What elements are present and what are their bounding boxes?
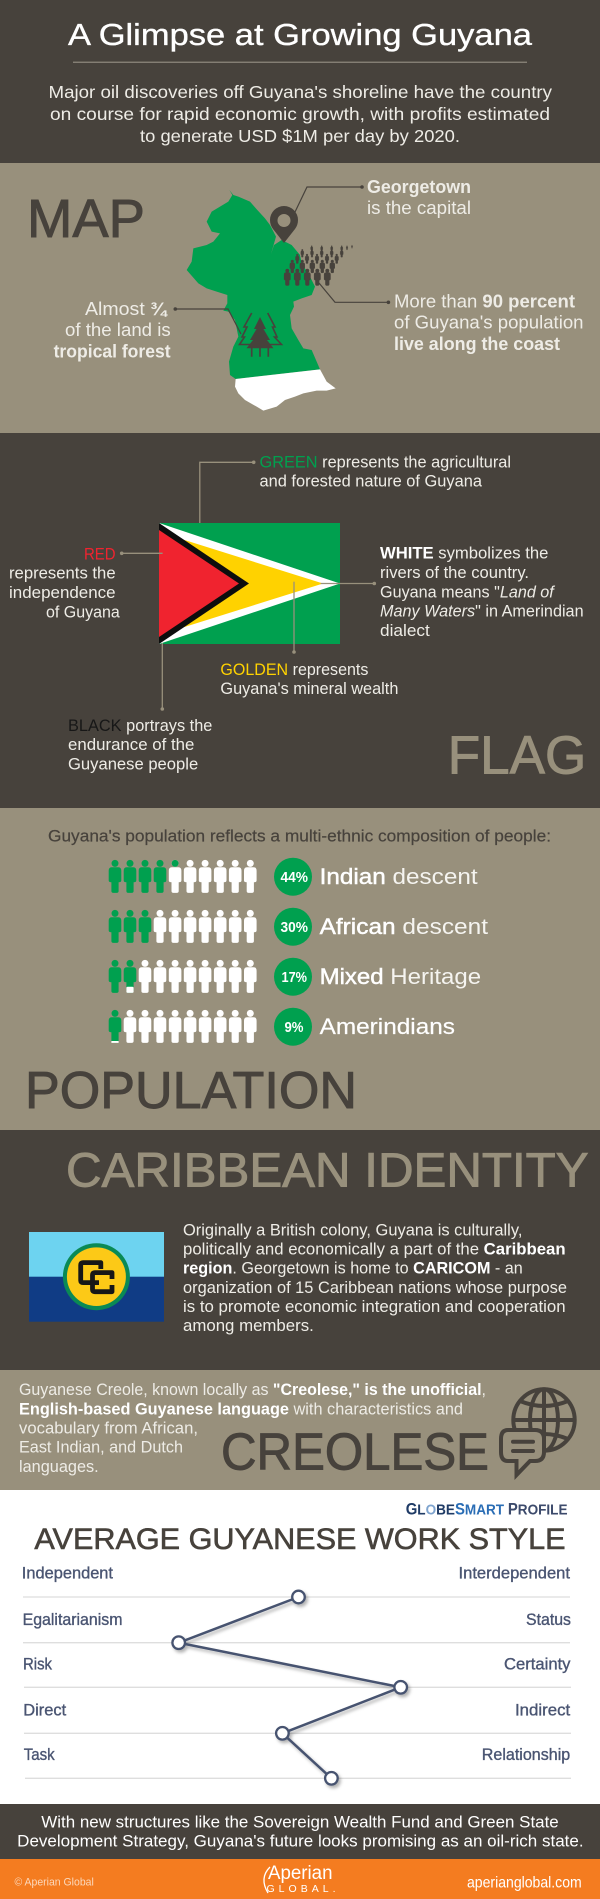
intro text: on course for rapid economic growth, with profits estimated: [50, 104, 550, 124]
stat badge: 17%: 17%: [282, 970, 307, 986]
panel: population: [0, 808, 600, 1130]
label: Indian descent: Indian descent: [320, 864, 478, 889]
Caribbean identity text: organization of 15 Caribbean nations whose purpose: [183, 1279, 567, 1297]
title: A Glimpse at Growing Guyana: [68, 17, 533, 52]
label: black: BLACK portrays the: [68, 717, 212, 735]
callout line: green: [200, 460, 256, 523]
label: tropical forest: of the land is: [65, 320, 171, 340]
pictogram row: Amerindians 9%: [109, 1010, 257, 1043]
panel: Creolese: [0, 1370, 600, 1490]
label: white: WHITE symbolizes the: [380, 545, 548, 563]
callout line: black: [160, 643, 164, 711]
intro text: Major oil discoveries off Guyana's shoreline have the country: [48, 82, 552, 102]
heading: FLAG: FLAG: [448, 725, 586, 785]
callout line: white: [321, 582, 376, 585]
line chart: work style profile: [172, 1591, 407, 1785]
label: red: independence: [9, 584, 116, 602]
label: tropical forest: Almost ¾: [85, 299, 169, 319]
logo: Aperian Global: [264, 1863, 336, 1895]
callout line: population: [319, 283, 390, 304]
label: black: endurance of the: [68, 736, 194, 754]
stat badge: 9%: [274, 1008, 312, 1046]
label: Georgetown: [367, 177, 471, 218]
Creolese text: [19, 1381, 486, 1476]
Caribbean identity text: region. Georgetown is home to CARICOM - an: [183, 1260, 523, 1278]
heading: CARIBBEAN IDENTITY: CARIBBEAN IDENTITY: [66, 1145, 589, 1198]
label: population along coast: [394, 291, 584, 354]
website: aperianglobal.com: [467, 1874, 582, 1891]
label: tropical forest: tropical forest: [54, 341, 171, 361]
label: white: rivers of the country.: [380, 564, 529, 582]
label: Georgetown: Georgetown: [367, 177, 471, 197]
labels: right dimensions: [458, 1565, 571, 1764]
label: Mixed Heritage: Mixed Heritage: [320, 964, 481, 989]
label: white: Guyana means "Land of: [380, 583, 556, 601]
labels: right dimensions: Status: [526, 1611, 571, 1629]
heading: POPULATION: POPULATION: [25, 1062, 357, 1120]
Caribbean identity text: Originally a British colony, Guyana is culturally,: [183, 1221, 522, 1239]
label: red: represents the: [9, 565, 116, 583]
stat badge: 44%: 44%: [280, 870, 308, 886]
conclusion text: [17, 1812, 584, 1851]
intro text: [48, 82, 552, 146]
panel: conclusion: [0, 1804, 600, 1859]
label: population along coast: More than 90 percent: [394, 291, 575, 311]
icon: coastal population crowd: [284, 245, 353, 285]
label: white: Many Waters" in Amerindian: [380, 602, 584, 620]
Creolese text: East Indian, and Dutch: [19, 1439, 183, 1457]
panel: header: [0, 0, 600, 163]
label: green: [260, 454, 511, 491]
conclusion text: With new structures like the Sovereign Wealth Fund and Green State: [41, 1812, 559, 1831]
labels: left dimensions: Egalitarianism: [23, 1611, 123, 1629]
callout line: red: [120, 552, 163, 555]
label: red: of Guyana: [46, 603, 121, 621]
logo: GlobeSmart Profile: GLOBESMART PROFILE: [406, 1500, 568, 1518]
Creolese text: languages.: [19, 1458, 99, 1476]
labels: right dimensions: Relationship: [482, 1746, 570, 1764]
labels: left dimensions: Direct: [23, 1701, 67, 1719]
stat badge: 30%: [274, 908, 312, 946]
heading: MAP: MAP: [27, 189, 145, 249]
Creolese text: Guyanese Creole, known locally as "Creolese," is the unofficial,: [19, 1381, 486, 1399]
label: white: [380, 545, 584, 640]
labels: left dimensions: Independent: [22, 1565, 113, 1583]
label: golden: Guyana's mineral wealth: [220, 680, 398, 698]
pictogram row: African 30%: [109, 910, 257, 943]
pictogram row: Mixed 17%: [109, 960, 257, 993]
copyright: © Aperian Global: [14, 1877, 94, 1889]
map of Guyana: [187, 190, 336, 411]
label: red: RED: [84, 545, 116, 563]
heading: CREOLESE: CREOLESE: [221, 1423, 489, 1481]
CARICOM flag: [29, 1232, 164, 1322]
Creolese text: vocabulary from African,: [19, 1420, 198, 1438]
label: tropical forest: [54, 299, 171, 361]
stat badge: 30%: 30%: [280, 920, 308, 936]
stat badge: 9%: 9%: [284, 1020, 304, 1036]
heading: Average Guyanese Work Style: AVERAGE GUYANESE WORK STYLE: [34, 1523, 566, 1556]
panel: footer: [0, 1859, 600, 1899]
callout line: forest: [174, 307, 241, 334]
label: golden: [220, 661, 398, 698]
labels: left dimensions: Task: [24, 1746, 55, 1764]
label: African descent: African descent: [320, 914, 488, 939]
stat badge: 17%: [274, 958, 312, 996]
label: black: [68, 717, 212, 773]
label: population along coast: of Guyana's population: [394, 313, 584, 333]
label: red: [9, 545, 121, 621]
panel: Caribbean identity: [0, 1130, 600, 1370]
Caribbean identity text: politically and economically a part of the Caribbean: [183, 1241, 566, 1259]
label: green: and forested nature of Guyana: [260, 473, 483, 491]
label: green: GREEN represents the agricultural: [260, 454, 511, 472]
label: Georgetown: is the capital: [367, 198, 471, 218]
labels: left dimensions: [22, 1565, 122, 1764]
panel: flag: [0, 433, 600, 808]
label: Amerindians: Amerindians: [320, 1014, 455, 1039]
logo: Aperian Global: Aperian: [268, 1863, 332, 1884]
callout line: Georgetown: [295, 185, 364, 212]
label: population along coast: live along the coast: [394, 334, 560, 354]
icon: forest trees: [240, 313, 282, 357]
label: golden: GOLDEN represents: [220, 661, 368, 679]
labels: left dimensions: Risk: [23, 1655, 53, 1673]
stat badge: 44%: [274, 858, 312, 896]
conclusion text: Development Strategy, Guyana's future looks promising as an oil-rich state.: [17, 1832, 584, 1851]
icon: location pin: [270, 206, 298, 243]
icon: globe with speech bubble: [501, 1389, 575, 1475]
Guyana flag: [159, 523, 340, 644]
population intro text: Guyana's population reflects a multi-ethnic composition of people:: [48, 827, 551, 846]
label: white: dialect: [380, 622, 430, 640]
label: black: Guyanese people: [68, 755, 198, 773]
Creolese text: English-based Guyanese language with characteristics and: [19, 1400, 463, 1418]
logo: Aperian Global: GLOBAL.: [266, 1883, 336, 1895]
panel: work style: [0, 1490, 600, 1804]
labels: right dimensions: Indirect: [515, 1701, 571, 1719]
panel: map: [0, 163, 600, 433]
Caribbean identity text: [183, 1221, 567, 1335]
labels: right dimensions: Certainty: [504, 1655, 571, 1673]
Caribbean identity text: among members.: [183, 1317, 314, 1335]
intro text: to generate USD $1M per day by 2020.: [140, 126, 460, 146]
pictogram row: Indian 44%: [109, 860, 257, 893]
Caribbean identity text: is to promote economic integration and cooperation: [183, 1298, 566, 1316]
labels: right dimensions: Interdependent: [458, 1565, 570, 1583]
callout line: golden: [292, 582, 296, 654]
